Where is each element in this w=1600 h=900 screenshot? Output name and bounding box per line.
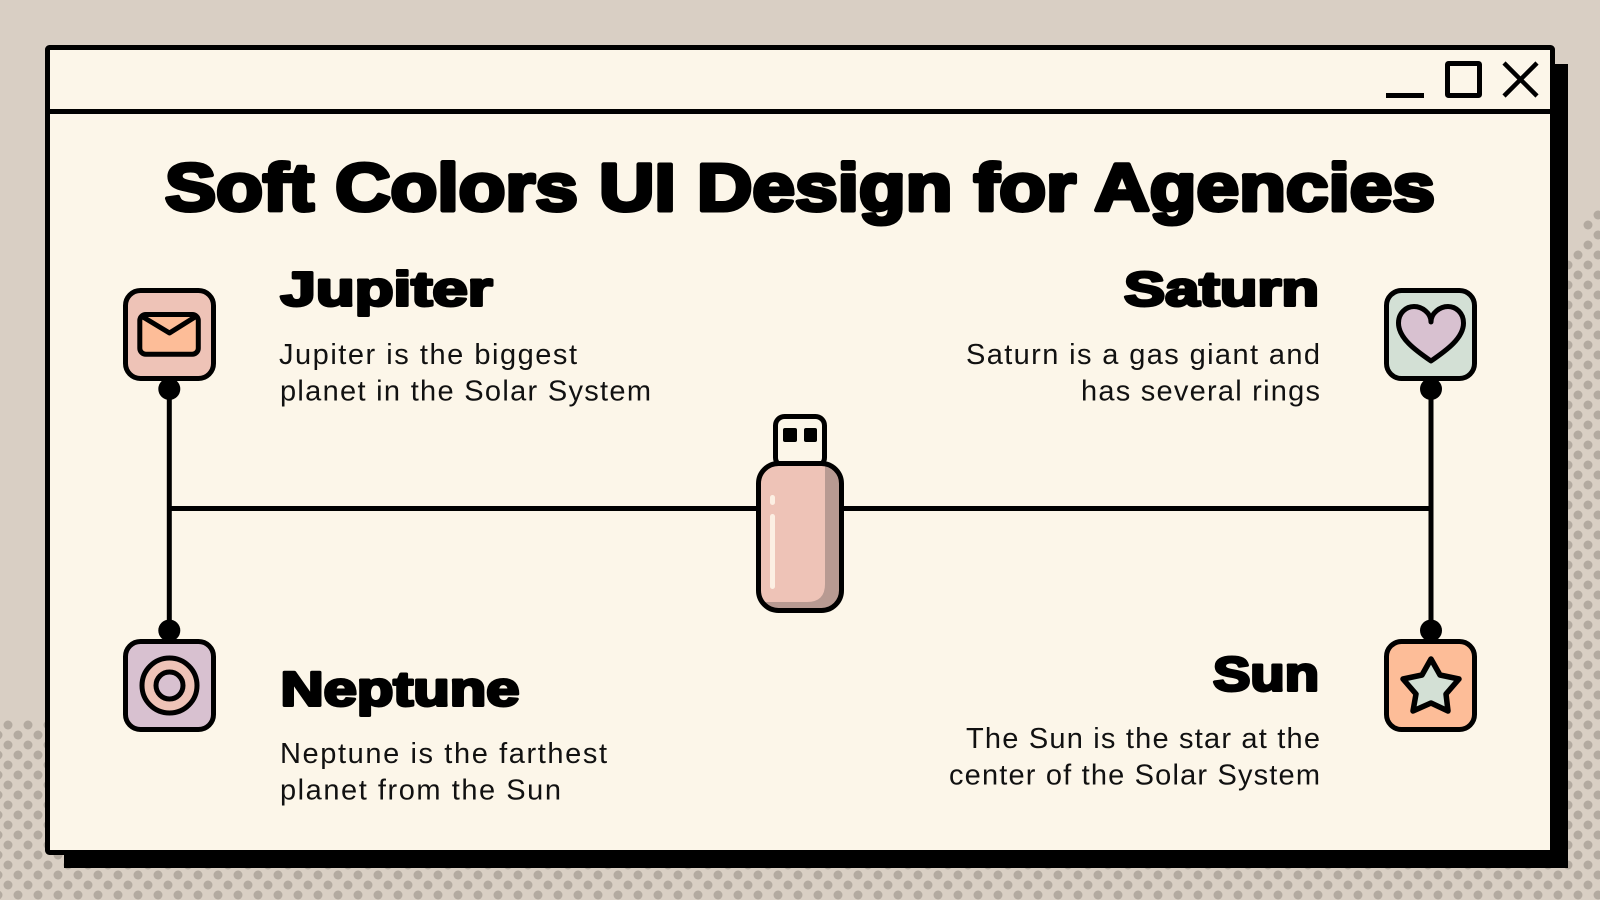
icon: USB drive <box>758 416 842 610</box>
heading: Sun: Sun <box>1213 648 1319 702</box>
window controls <box>1386 63 1537 98</box>
text block: Sun <box>949 648 1320 792</box>
description: Jupiter: Jupiter is the biggest <box>279 339 577 371</box>
heading: Saturn: Saturn <box>1124 264 1319 316</box>
icon: maximize <box>1448 64 1480 96</box>
icon: target <box>126 642 214 730</box>
description: Sun: center of the Solar System <box>949 760 1320 792</box>
description: Saturn: has several rings <box>1081 376 1320 408</box>
text block: Neptune <box>280 664 607 806</box>
connector lines <box>158 378 1442 642</box>
description: Jupiter: planet in the Solar System <box>280 376 651 408</box>
heading: Jupiter: Jupiter <box>280 264 492 316</box>
text block: Saturn <box>966 264 1320 408</box>
heading: Neptune: Neptune <box>280 664 520 716</box>
title: Soft Colors UI Design for Agencies <box>165 150 1435 226</box>
description: Sun: The Sun is the star at the <box>966 723 1320 755</box>
icon: minimize <box>1386 93 1424 98</box>
description: Neptune: Neptune is the farthest <box>280 738 607 770</box>
text block: Jupiter <box>279 264 651 408</box>
icon: star <box>1386 642 1474 730</box>
icon: heart <box>1386 290 1474 378</box>
description: Saturn: Saturn is a gas giant and <box>966 339 1320 371</box>
icon: mail <box>126 290 214 378</box>
description: Neptune: planet from the Sun <box>280 774 561 806</box>
icon: close <box>1504 63 1537 96</box>
